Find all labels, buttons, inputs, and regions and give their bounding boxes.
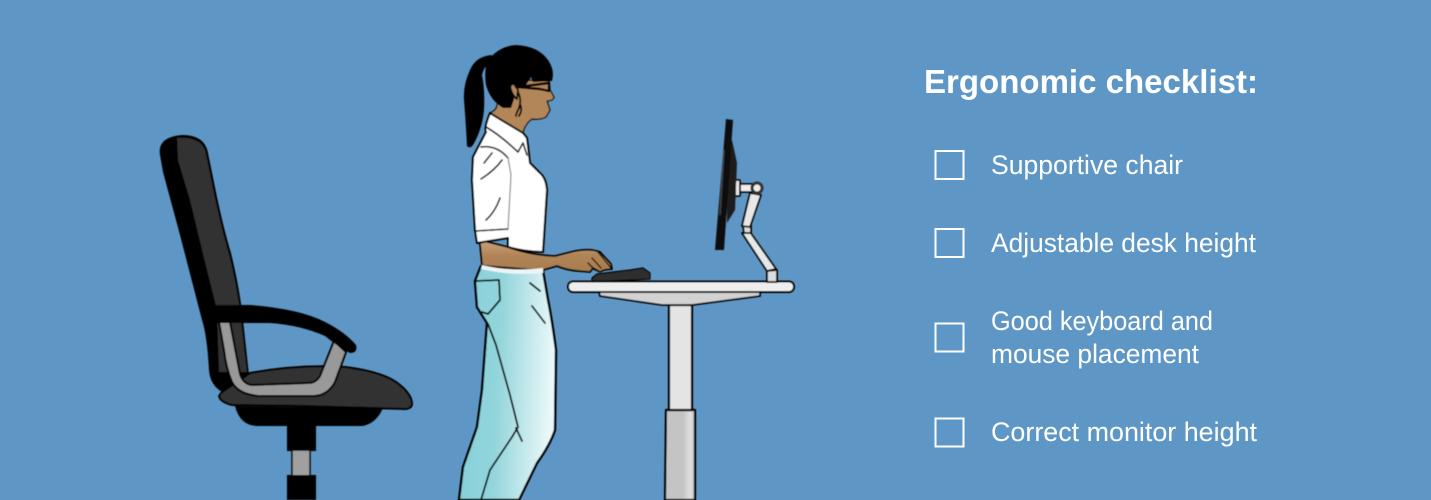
sleeve seam bbox=[508, 158, 511, 229]
ponytail bbox=[464, 55, 492, 147]
waistband bbox=[481, 265, 543, 274]
desk upper column bbox=[669, 305, 692, 410]
desk bracket bbox=[599, 292, 760, 305]
ear and curl bbox=[510, 84, 521, 116]
desk top bbox=[568, 282, 794, 292]
chair back bbox=[160, 135, 249, 392]
glasses bbox=[518, 83, 549, 91]
chair seat bbox=[219, 366, 412, 409]
forearm and hand bbox=[480, 240, 612, 272]
chair armrest bbox=[215, 305, 356, 353]
monitor arm bbox=[735, 180, 777, 282]
shirt collar and creases bbox=[476, 127, 527, 231]
keyboard bbox=[592, 268, 650, 281]
pants seam and pocket bbox=[476, 280, 545, 500]
checklist item: correct monitor height: Correct monitor height bbox=[991, 417, 1257, 447]
checklist item: keyboard and mouse placement: Good keyboard and bbox=[991, 306, 1213, 336]
checklist item: adjustable desk height: Adjustable desk height bbox=[991, 228, 1256, 258]
checklist item: keyboard and mouse placement bbox=[936, 306, 1213, 369]
title: Ergonomic checklist: bbox=[924, 63, 1258, 100]
monitor bbox=[715, 119, 737, 250]
checklist item: supportive chair: Supportive chair bbox=[991, 150, 1183, 180]
checklist item: keyboard and mouse placement: mouse placement bbox=[991, 339, 1199, 369]
chair seat base bbox=[235, 406, 383, 426]
neck and face bbox=[490, 80, 554, 137]
chair arm support bbox=[219, 322, 346, 396]
illustration: standing woman bbox=[459, 45, 612, 500]
illustration: standing desk bbox=[568, 119, 794, 500]
chair post bbox=[287, 424, 316, 500]
shirt bbox=[472, 113, 547, 252]
illustration: office chair bbox=[160, 135, 412, 500]
finger lines bbox=[588, 252, 611, 270]
pants bbox=[459, 266, 556, 500]
desk lower column bbox=[665, 410, 695, 500]
hair bbox=[485, 45, 553, 108]
